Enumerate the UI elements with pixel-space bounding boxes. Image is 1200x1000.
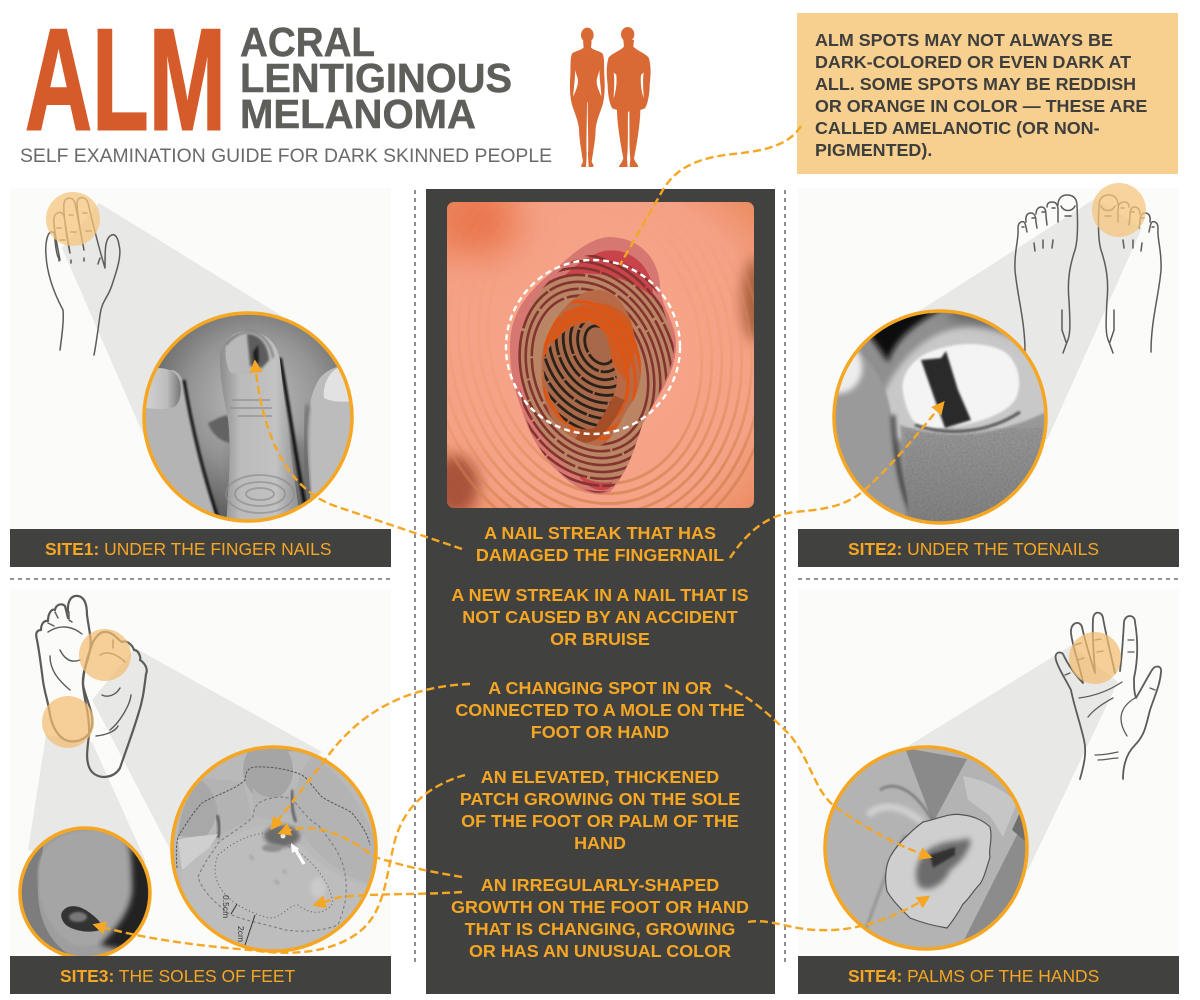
left finger xyxy=(146,370,215,514)
sign: changing spot xyxy=(455,678,745,742)
sign: changing spot: FOOT OR HAND xyxy=(531,722,669,742)
dashed white circle xyxy=(506,260,680,434)
panel: site 1 finger nails xyxy=(10,188,391,567)
callout: amelanotic note: OR ORANGE IN COLOR — THESE ARE xyxy=(815,96,1147,116)
sign: elevated patch: OF THE FOOT OR PALM OF THE xyxy=(461,811,739,831)
arrow: elevated patch to heel xyxy=(95,775,465,953)
icon: open hand xyxy=(1056,613,1161,779)
subtitle: SELF EXAMINATION GUIDE FOR DARK SKINNED PEOPLE xyxy=(20,145,552,167)
panel: site 2 toenails xyxy=(798,183,1179,567)
arrow: changing spot to sole xyxy=(272,684,470,828)
right gap xyxy=(280,358,306,510)
nail xyxy=(226,339,236,374)
highlight circle xyxy=(1092,183,1146,237)
highlight circle xyxy=(1069,632,1121,684)
icon: human silhouettes xyxy=(570,27,651,167)
icon: hand xyxy=(46,198,120,355)
label bar: SITE2: UNDER THE TOENAILS xyxy=(848,539,1099,559)
sign: nail streak damage xyxy=(476,523,724,565)
sign: changing spot: CONNECTED TO A MOLE ON THE xyxy=(455,700,745,720)
arrow: irregular growth to sole lesion xyxy=(280,828,462,877)
photo: palm lesion xyxy=(822,743,1030,954)
sign: elevated patch: PATCH GROWING ON THE SOLE xyxy=(460,789,740,809)
zoom beam xyxy=(62,203,282,450)
sign: new streak: NOT CAUSED BY AN ACCIDENT xyxy=(462,607,738,627)
arrow: irregular growth to sole edge xyxy=(315,892,462,905)
panel: site 4 palms xyxy=(798,589,1179,994)
sign: new streak: OR BRUISE xyxy=(550,629,650,649)
sign: irregular growth xyxy=(451,875,749,961)
zoom beam xyxy=(908,645,1118,870)
sign: elevated patch xyxy=(460,767,740,853)
label bar xyxy=(798,529,1179,567)
sign: new streak: A NEW STREAK IN A NAIL THAT IS xyxy=(451,585,749,605)
photo: foot sole: 0.5cm xyxy=(221,895,231,918)
callout: amelanotic note: DARK-COLORED OR EVEN DARK AT xyxy=(815,52,1131,72)
callout: amelanotic note: ALL. SOME SPOTS MAY BE REDDISH xyxy=(815,74,1136,94)
title: full name: ACRAL xyxy=(240,19,375,65)
sign: irregular growth: GROWTH ON THE FOOT OR HAND xyxy=(451,897,749,917)
photo: foot sole xyxy=(174,748,374,950)
illustration: fingerprint lesion xyxy=(447,202,754,508)
photo: toenail xyxy=(836,312,1044,522)
skin ridges xyxy=(447,282,754,508)
sign: nail streak damage: A NAIL STREAK THAT HAS xyxy=(484,523,716,543)
panel: site 3 soles xyxy=(10,589,391,994)
right finger xyxy=(307,367,350,498)
sign: changing spot: A CHANGING SPOT IN OR xyxy=(488,678,712,698)
arrow: callout to lesion xyxy=(620,126,801,265)
callout: amelanotic note: PIGMENTED). xyxy=(815,140,932,160)
label bar: SITE3: THE SOLES OF FEET xyxy=(60,966,295,986)
orange zone xyxy=(541,290,641,446)
sign: elevated patch: HAND xyxy=(574,833,626,853)
sign: elevated patch: AN ELEVATED, THICKENED xyxy=(481,767,719,787)
arrow: changing spot to palm xyxy=(725,685,930,857)
highlight circles xyxy=(42,629,131,748)
photo: foot sole: 2cm xyxy=(236,926,246,942)
zoom beams xyxy=(92,648,322,880)
centre finger xyxy=(220,331,300,530)
scar xyxy=(208,415,230,443)
arrow: irregular growth to palm xyxy=(748,897,928,930)
label bar: SITE1: UNDER THE FINGER NAILS xyxy=(45,539,331,559)
sign: new streak xyxy=(451,585,749,649)
lesion ridges xyxy=(518,255,674,493)
label bar xyxy=(798,956,1179,994)
label bar xyxy=(10,956,391,994)
sign: nail streak damage: DAMAGED THE FINGERNAIL xyxy=(476,545,724,565)
arrow: nail damage to toenail xyxy=(730,403,943,558)
panel: central signs xyxy=(426,189,775,994)
photo: fingernail xyxy=(146,314,350,520)
label bar: SITE4: PALMS OF THE HANDS xyxy=(848,966,1099,986)
sign: irregular growth: AN IRREGULARLY-SHAPED xyxy=(481,875,719,895)
dark core xyxy=(543,323,617,429)
callout: amelanotic note xyxy=(797,13,1178,174)
icon: feet xyxy=(1015,195,1161,353)
zoom beam xyxy=(905,198,1142,440)
sign: irregular growth: THAT IS CHANGING, GROWING xyxy=(465,919,735,939)
callout: amelanotic note: ALM SPOTS MAY NOT ALWAYS BE xyxy=(815,30,1113,50)
lesion outer blob xyxy=(510,237,676,494)
white arrow xyxy=(294,847,304,864)
label bar xyxy=(10,529,391,567)
highlight circle xyxy=(46,192,100,246)
arrow: nail streak to fingernail xyxy=(255,362,462,549)
title: full name: MELANOMA xyxy=(240,91,476,137)
title xyxy=(20,0,552,167)
title: ALM wordmark: ALM xyxy=(25,0,226,160)
title: full name: LENTIGINOUS xyxy=(240,55,512,101)
wrinkles xyxy=(226,400,294,513)
photo: heel lesion xyxy=(22,830,148,956)
icon: soles of feet xyxy=(36,596,147,777)
sign: irregular growth: OR HAS AN UNUSUAL COLOR xyxy=(469,941,731,961)
callout: amelanotic note: CALLED AMELANOTIC (OR NON- xyxy=(815,118,1100,138)
title: full name xyxy=(240,19,512,137)
